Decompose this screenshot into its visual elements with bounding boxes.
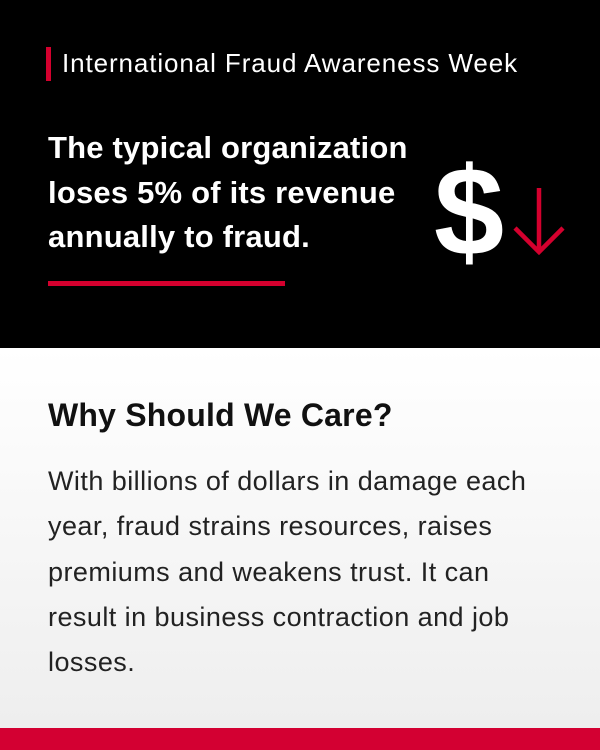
panel: header black	[0, 0, 600, 348]
panel: why should we care	[0, 348, 600, 728]
icon: dollar with down arrow: $	[434, 141, 504, 282]
heading: Why Should We Care?	[48, 397, 393, 433]
body text: With billions of dollars in damage each year, fraud strains resources, raises premiums and weakens trust. It can result in business contraction and job losses.	[48, 466, 526, 677]
headline: The typical organization loses 5% of its revenue annually to fraud.	[48, 130, 408, 254]
footer red bar	[0, 728, 600, 750]
underline accent	[48, 281, 285, 286]
tag: event name	[46, 47, 518, 81]
icon: dollar with down arrow	[434, 141, 564, 282]
panel: header black: International Fraud Awareness Week	[62, 48, 518, 78]
